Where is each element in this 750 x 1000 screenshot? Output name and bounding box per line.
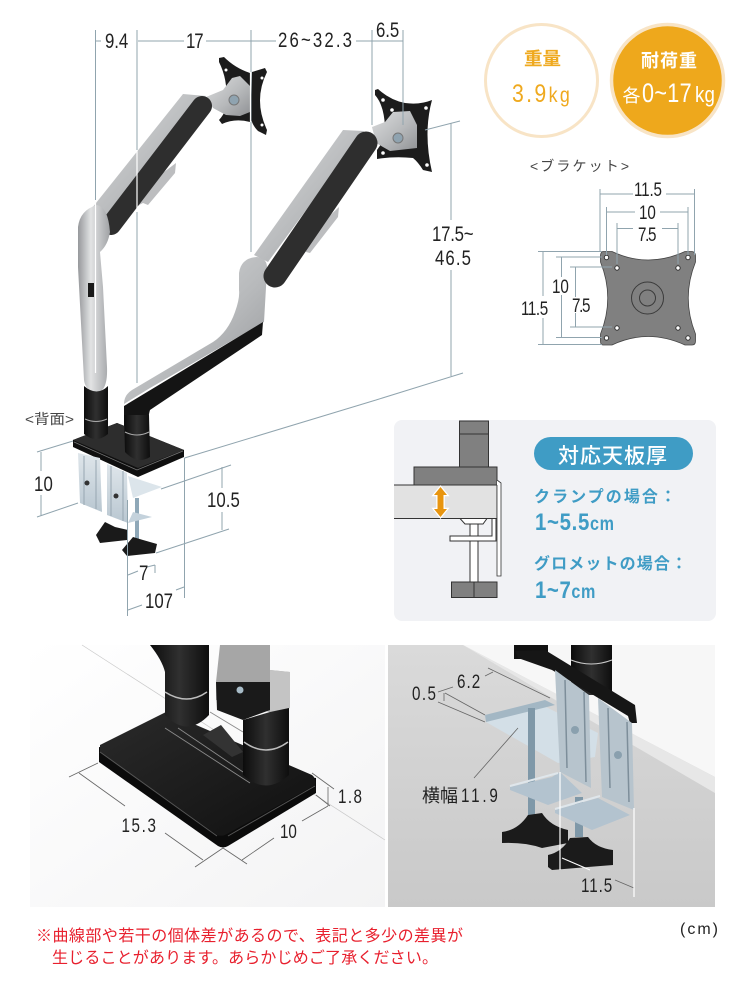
upper plate <box>485 700 598 763</box>
dimension: clamp 7: 7 <box>139 562 148 586</box>
clamp mount <box>515 650 637 723</box>
grommet case label: グロメットの場合： <box>534 554 687 573</box>
clamp case value: 1~5.5cm <box>535 508 614 535</box>
dimension: clamp 10: 10 <box>34 473 53 497</box>
dimension: bracket 7.5 width: 7.5 <box>638 223 656 245</box>
badge: weight: 3.9kg <box>512 79 570 107</box>
dimension: width label: 横幅 <box>422 786 458 806</box>
bracket dimension lines <box>538 189 694 344</box>
knob front <box>548 837 613 870</box>
dimension: width 11.9: 11.9 <box>461 784 498 806</box>
dimension: clamp 10.5: 10.5 <box>207 489 240 513</box>
unit note: (cm) <box>680 921 718 938</box>
label: bracket: <ブラケット> <box>530 158 629 174</box>
right arm lower silver section <box>124 257 267 404</box>
bracket centre rings <box>632 282 664 314</box>
rear bracket foot <box>510 772 582 805</box>
icon: thickness arrow <box>434 487 447 517</box>
badge: load capacity: 各 <box>622 86 640 106</box>
rod 1 <box>528 708 535 815</box>
right post ring <box>244 742 288 750</box>
dimension: 26~32.3: 26~32.3 <box>278 29 352 53</box>
clamp knob rear <box>96 522 128 543</box>
joint black band <box>216 682 270 720</box>
left arm rear tab <box>135 163 176 207</box>
badge: weight <box>486 24 598 136</box>
dimension lines: clamp <box>37 441 231 616</box>
dimension: 15.3: 15.3 <box>122 814 156 836</box>
left arm upper silver section <box>92 94 206 222</box>
heading pill <box>534 437 693 470</box>
dimension: 1.8: 1.8 <box>338 785 362 807</box>
disclaimer <box>36 927 463 967</box>
clamp case label: クランプの場合： <box>534 488 676 506</box>
disclaimer: ※曲線部や若干の個体差があるので、表記と多少の差異が <box>36 927 463 945</box>
right arm rear tab <box>305 207 339 253</box>
photo dimension lines <box>69 763 334 867</box>
badge: load capacity: kg <box>695 84 715 107</box>
dimension: 17: 17 <box>186 30 204 54</box>
badge: load capacity <box>612 24 724 136</box>
clamp bracket rear <box>78 453 102 512</box>
right arm lower black section <box>124 322 263 440</box>
heading pill: 対応天板厚 <box>558 445 667 468</box>
label: back view: <背面> <box>25 411 74 427</box>
clamp base plate <box>73 423 184 477</box>
dimension: 46.5: 46.5 <box>435 247 471 271</box>
badge: load capacity: 耐荷重 <box>641 51 697 71</box>
dimension: bracket 11.5 width: 11.5 <box>634 178 662 200</box>
white dimension lines <box>560 772 634 897</box>
dimension: bracket 10 height: 10 <box>552 275 569 297</box>
icon: right arm monitor bracket <box>375 89 432 172</box>
base front highlight <box>100 752 315 836</box>
left black post <box>84 386 108 439</box>
panel: base photo <box>30 645 385 907</box>
joint light section <box>270 670 290 712</box>
base plate side <box>99 747 316 848</box>
base plate top <box>100 712 315 836</box>
dimension: clamp 107: 107 <box>145 590 173 614</box>
background above desk <box>463 645 715 777</box>
right black post <box>124 415 150 460</box>
clamp threaded rod <box>135 498 139 540</box>
dimension: bracket 11.5 height: 11.5 <box>521 297 548 319</box>
dimension lines: arm <box>96 30 463 458</box>
dimension: base 10: 10 <box>280 820 297 842</box>
rear bracket <box>555 670 591 788</box>
clamp upper plate <box>128 476 162 498</box>
desk edge <box>463 645 715 793</box>
dimension: bracket 7.5 height: 7.5 <box>572 294 590 316</box>
left post <box>150 645 209 726</box>
dimension: 17.5~: 17.5~ <box>432 223 474 247</box>
right arm upper black section <box>275 143 366 276</box>
panel: supported desk thickness <box>394 420 716 621</box>
front bracket <box>598 698 634 810</box>
front bracket foot <box>555 796 630 830</box>
photo dimension lines <box>438 668 634 888</box>
left arm upper black section <box>111 106 202 225</box>
bracket plate <box>600 252 696 345</box>
dimension: 9.4: 9.4 <box>105 30 129 54</box>
dimension: 11.5: 11.5 <box>581 874 612 896</box>
clamp lower plate <box>128 512 152 523</box>
clamp section diagram <box>394 421 501 598</box>
panel: clamp photo <box>388 645 715 907</box>
product illustration: dual monitor arm <box>73 57 432 556</box>
grey joint <box>216 645 290 712</box>
bracket screw holes <box>604 255 690 340</box>
clamp knob front <box>122 537 157 556</box>
base centre recess <box>165 712 250 783</box>
left arm lower silver section <box>78 205 110 393</box>
knob rear <box>502 813 568 848</box>
black posts <box>514 645 612 695</box>
badge: weight: 重量 <box>524 49 561 69</box>
rod 2 <box>575 797 583 837</box>
left post ring <box>165 692 207 699</box>
dimension: 0.5: 0.5 <box>412 682 436 704</box>
dimension: bracket 10 width: 10 <box>639 201 656 223</box>
icon: left arm tilt joint <box>206 76 250 116</box>
grommet case value: 1~7cm <box>535 576 595 603</box>
icon: right arm tilt joint <box>372 111 417 151</box>
disclaimer: 生じることがあります。あらかじめご了承ください。 <box>52 949 438 967</box>
dimension: 6.2: 6.2 <box>457 670 480 692</box>
bracket diagram <box>538 189 696 345</box>
right arm upper silver section <box>254 130 364 262</box>
dimension: 6.5: 6.5 <box>376 19 399 43</box>
right post <box>243 708 289 786</box>
left arm slot <box>88 283 94 297</box>
badge: load capacity: 0~17 <box>642 79 692 109</box>
clamp bracket front <box>107 464 128 523</box>
icon: left arm monitor bracket <box>219 57 267 135</box>
